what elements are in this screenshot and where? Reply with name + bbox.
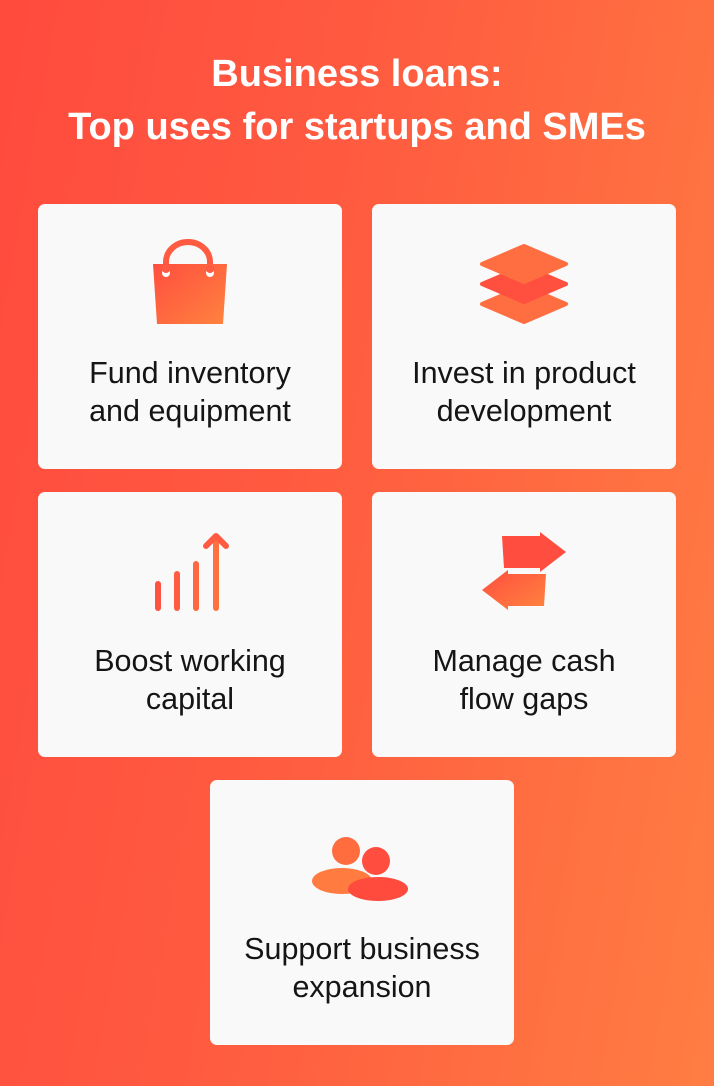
text: Invest in product: [412, 356, 636, 390]
text: [244, 932, 480, 1004]
title: [68, 53, 646, 148]
text: Manage cash: [432, 644, 616, 678]
text: development: [437, 394, 611, 428]
text: [89, 356, 291, 428]
title: Business loans:: [211, 53, 503, 95]
icon: people: [312, 837, 408, 901]
text: and equipment: [89, 394, 291, 428]
text: capital: [146, 682, 234, 716]
text: [432, 644, 616, 716]
panel: expansion: [210, 780, 514, 1045]
icon: direction arrows: [482, 532, 566, 610]
icon: layers: [480, 244, 568, 324]
icon: shopping bag: [153, 239, 227, 324]
text: Support business: [244, 932, 480, 966]
text: expansion: [292, 970, 432, 1004]
text: flow gaps: [460, 682, 588, 716]
panel: fund inventory: [38, 204, 342, 469]
panel: cash flow: [372, 492, 676, 757]
title: Top uses for startups and SMEs: [68, 106, 646, 148]
text: [94, 644, 286, 716]
text: [412, 356, 636, 428]
icon: growth bars with arrow: [155, 533, 229, 611]
panel: working capital: [38, 492, 342, 757]
panel: product development: [372, 204, 676, 469]
text: Boost working: [94, 644, 286, 678]
text: Fund inventory: [89, 356, 291, 390]
